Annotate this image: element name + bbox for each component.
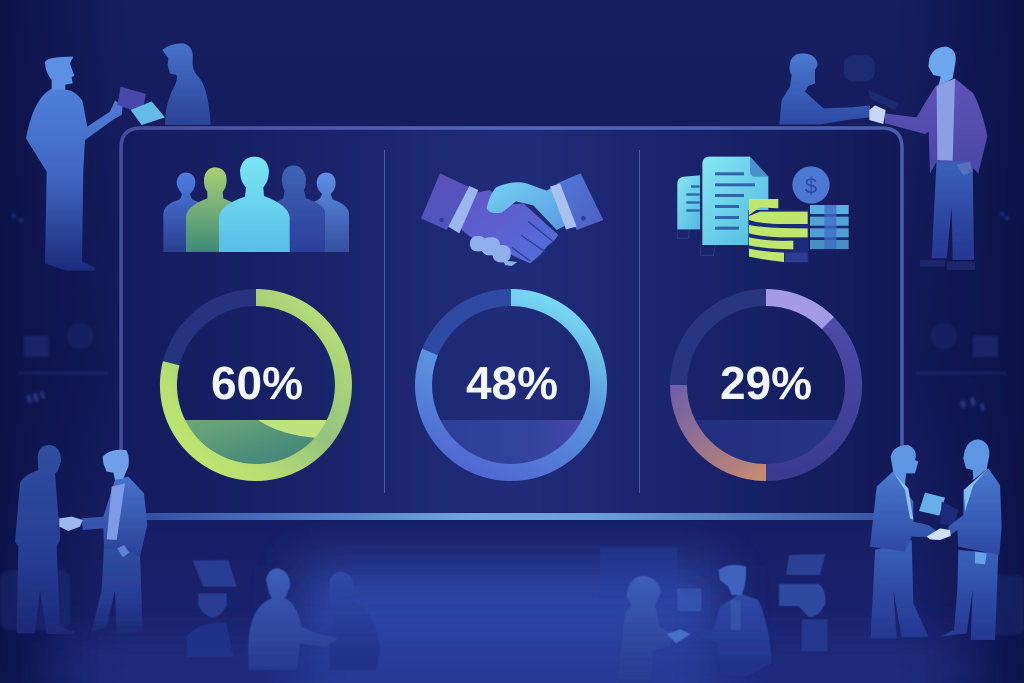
donut track	[678, 298, 854, 472]
figures: bottom-left pair	[15, 445, 147, 634]
background panel	[600, 547, 677, 597]
figure: graduate silhouette	[187, 560, 237, 658]
dim background figure	[844, 55, 898, 110]
background screens	[677, 554, 828, 651]
background dim props left	[0, 214, 108, 630]
figures: bottom-right center group	[600, 547, 828, 683]
panel column 1: workforce	[163, 157, 349, 473]
tablet: purple	[117, 87, 146, 113]
value: 48%	[466, 357, 558, 409]
segment: purple	[766, 323, 854, 472]
background dim props right	[916, 212, 1024, 635]
figure: right man	[927, 439, 1002, 640]
donut: 48%	[424, 298, 599, 472]
figure: two shaking hands	[248, 568, 380, 670]
panel bottom glow strip	[121, 513, 902, 520]
donut progress arc	[168, 298, 343, 472]
donut lower fill	[439, 420, 583, 465]
figure: seated man	[779, 53, 870, 124]
figure: man in purple jacket	[869, 47, 987, 270]
donut highlight swoosh	[258, 420, 329, 438]
donut track	[168, 298, 344, 472]
tablet: held document	[919, 493, 945, 516]
panel column 3: finance	[677, 157, 854, 473]
donut progress arc	[424, 298, 599, 472]
figures: top-right pair	[779, 47, 987, 270]
panel	[121, 128, 902, 520]
donut track	[424, 298, 598, 472]
value: 29%	[720, 357, 812, 409]
value: 60%	[211, 357, 303, 409]
segment: lavender	[766, 298, 828, 323]
donut: 29%	[678, 298, 854, 472]
figure: woman silhouette	[617, 576, 691, 683]
donut lower fill	[694, 420, 838, 465]
tablet: light blue	[131, 101, 165, 125]
figures: bottom-right pair	[870, 439, 1002, 640]
panel border	[121, 128, 902, 470]
icon: group of people	[163, 157, 349, 252]
donut lower fill	[184, 420, 328, 465]
panel column 2: partnerships	[421, 173, 603, 473]
figures: bottom-left center group	[187, 560, 380, 670]
figure: seated man	[162, 43, 211, 125]
icon: documents and money: $	[805, 173, 817, 198]
segment: orange	[678, 385, 766, 472]
figures: top-left pair	[26, 43, 211, 271]
figure: dark-suited man	[15, 445, 74, 634]
icon: documents and money	[677, 157, 849, 263]
figure: left man	[870, 445, 940, 638]
donut: 60%	[168, 298, 344, 472]
icon: handshake	[421, 173, 603, 266]
figure: standing man	[26, 57, 123, 271]
figure: light-faced man	[59, 450, 147, 634]
figure: man with tablet	[690, 565, 772, 677]
